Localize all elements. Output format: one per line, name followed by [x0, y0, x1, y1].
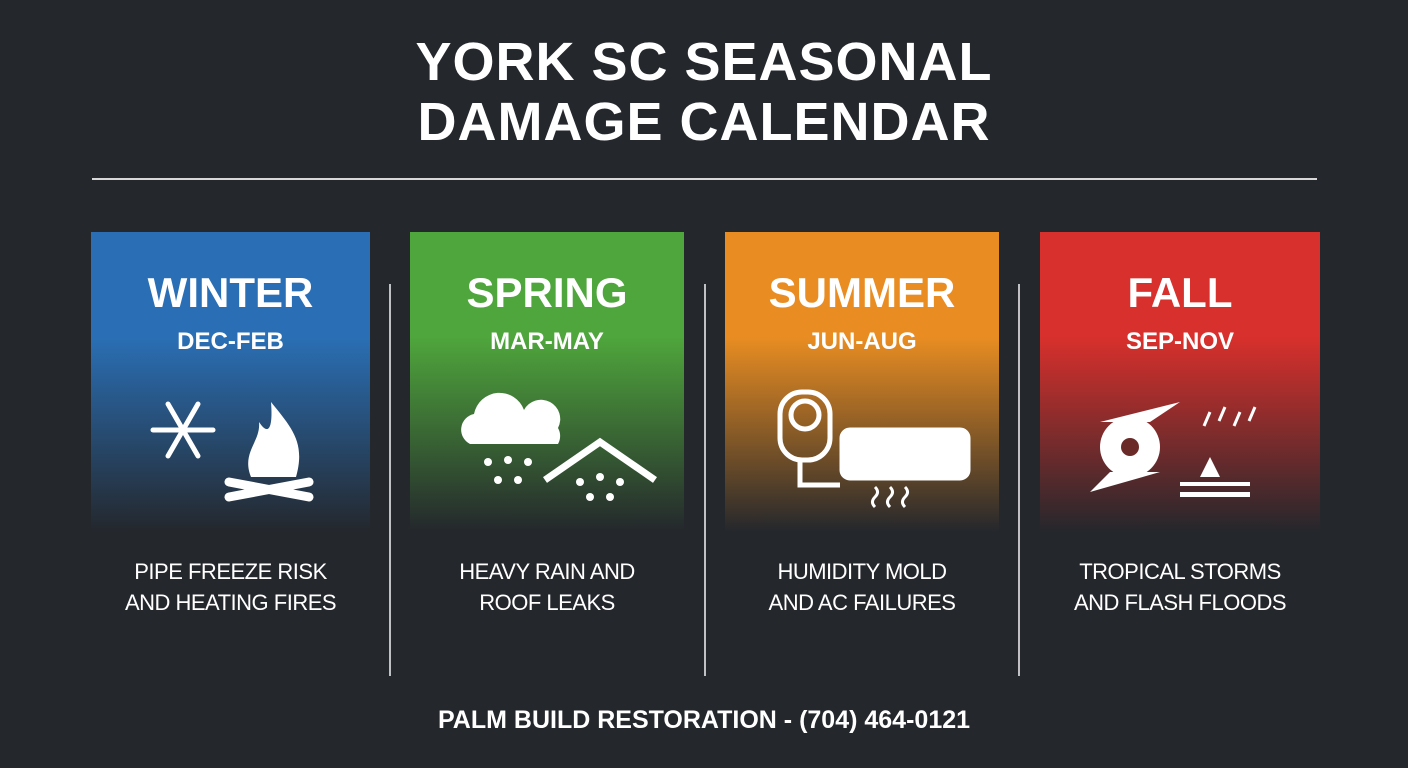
text: spring risk: ROOF LEAKS — [479, 590, 615, 615]
panel: summer: SUMMER — [769, 269, 955, 316]
text: winter risk — [125, 559, 336, 615]
text: fall risk: TROPICAL STORMS — [1079, 559, 1281, 584]
panel: spring: MAR-MAY — [490, 328, 604, 355]
text: winter risk: AND HEATING FIRES — [125, 590, 336, 615]
icon: gauge and AC unit — [778, 390, 970, 508]
title — [415, 32, 993, 152]
panel: spring — [410, 232, 684, 532]
text: summer risk — [768, 559, 955, 615]
panel: fall: FALL — [1128, 269, 1232, 316]
text: fall risk: AND FLASH FLOODS — [1074, 590, 1286, 615]
panel: summer — [725, 232, 999, 532]
text: spring risk: HEAVY RAIN AND — [459, 559, 635, 584]
footer: PALM BUILD RESTORATION - (704) 464-0121 — [438, 706, 970, 734]
panel: winter: WINTER — [148, 269, 313, 316]
text: summer risk: HUMIDITY MOLD — [777, 559, 947, 584]
text: spring risk — [459, 559, 635, 615]
panel: winter: DEC-FEB — [177, 328, 284, 355]
panel: summer: JUN-AUG — [807, 328, 917, 355]
title: DAMAGE CALENDAR — [418, 92, 990, 152]
icon: cloud rain and roof — [461, 392, 657, 501]
icon: hurricane and flood — [1090, 402, 1256, 497]
panel: fall — [1040, 232, 1320, 532]
panel: spring: SPRING — [466, 269, 628, 316]
panel: winter — [91, 232, 370, 532]
text: winter risk: PIPE FREEZE RISK — [134, 559, 327, 584]
text: summer risk: AND AC FAILURES — [769, 590, 955, 615]
panel: fall: SEP-NOV — [1126, 328, 1234, 355]
title: YORK SC SEASONAL — [415, 32, 993, 92]
text: fall risk — [1074, 559, 1286, 615]
icon: snowflake and fire — [150, 402, 314, 502]
